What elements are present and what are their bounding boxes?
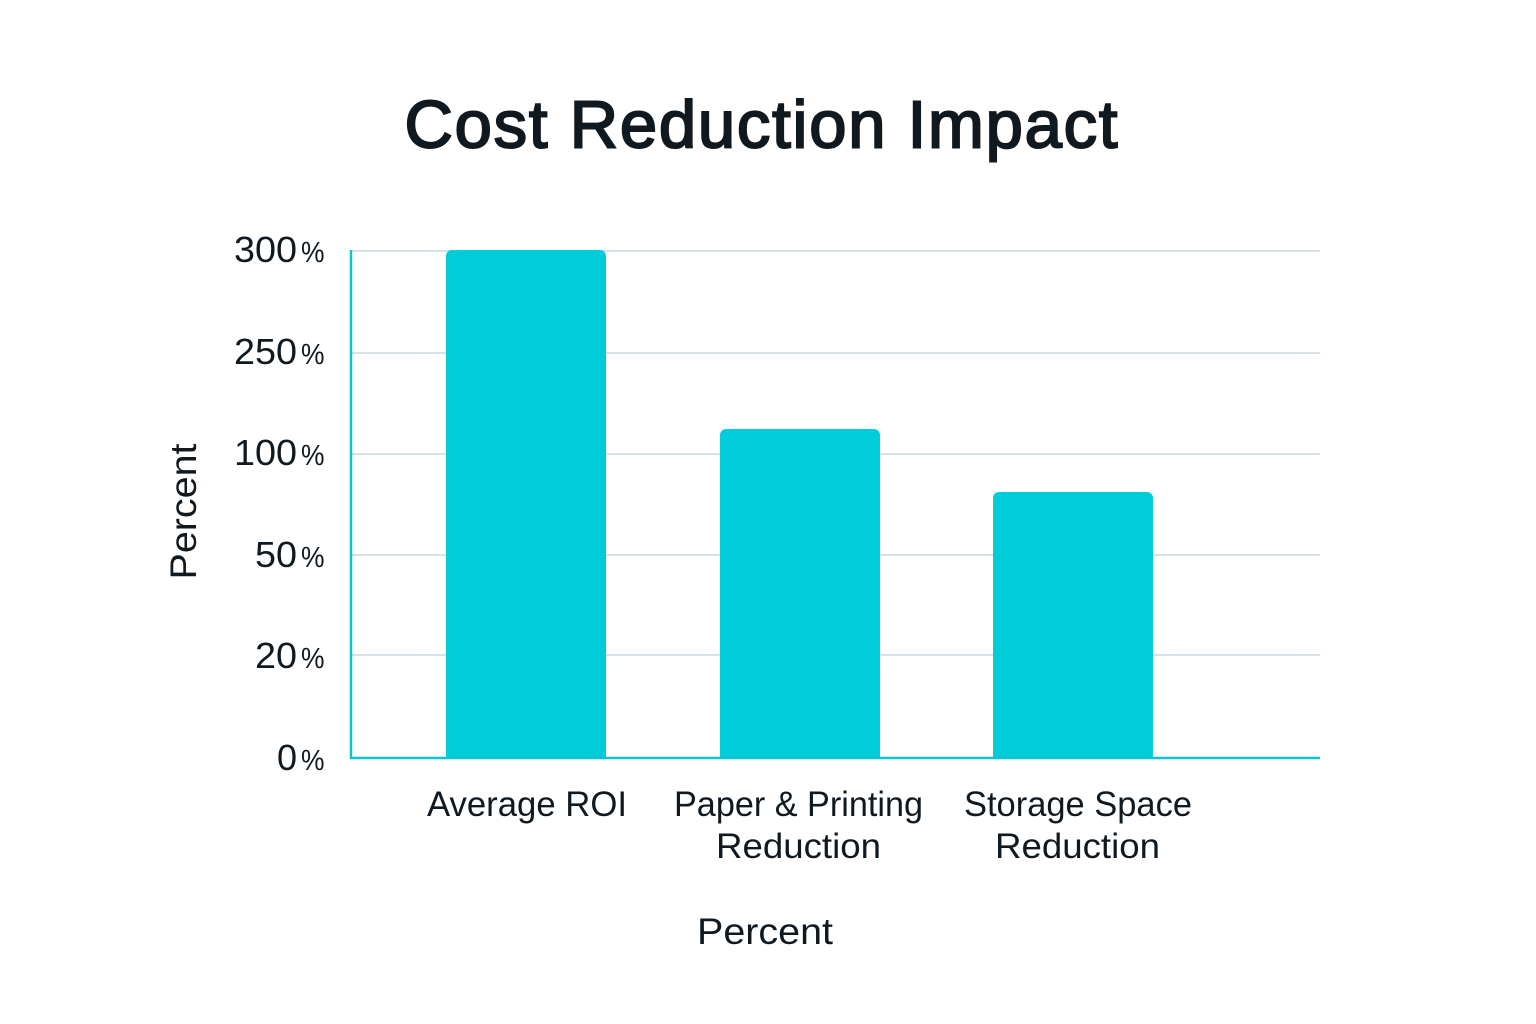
y axis labels: % <box>301 745 324 777</box>
chart axes <box>351 250 1320 758</box>
y axis title: Percent <box>163 443 204 580</box>
x axis category labels: Average ROI <box>427 785 627 824</box>
x axis category labels: Paper & Printing <box>674 785 923 824</box>
y axis labels: 250 <box>234 331 297 372</box>
y axis labels: 0 <box>277 737 297 778</box>
y axis labels <box>234 229 324 778</box>
y axis labels: 20 <box>255 635 297 676</box>
bar: Average ROI <box>446 250 606 759</box>
y axis labels: 50 <box>255 534 297 575</box>
x axis category labels: Reduction <box>716 827 881 866</box>
x axis category labels: Reduction <box>995 827 1160 866</box>
bar: Storage Space Reduction <box>993 492 1153 759</box>
title: Cost Reduction Impact <box>404 88 1118 162</box>
x axis title: Percent <box>697 911 834 952</box>
y axis labels: % <box>301 237 324 269</box>
y axis labels: % <box>301 440 324 472</box>
bar: Paper & Printing Reduction <box>720 429 880 759</box>
x axis category labels <box>427 785 1192 866</box>
y axis labels: % <box>301 339 324 371</box>
y axis labels: % <box>301 643 324 675</box>
y axis labels: 300 <box>234 229 297 270</box>
y axis labels: 100 <box>234 432 297 473</box>
y axis labels: % <box>301 542 324 574</box>
x axis category labels: Storage Space <box>964 785 1192 824</box>
